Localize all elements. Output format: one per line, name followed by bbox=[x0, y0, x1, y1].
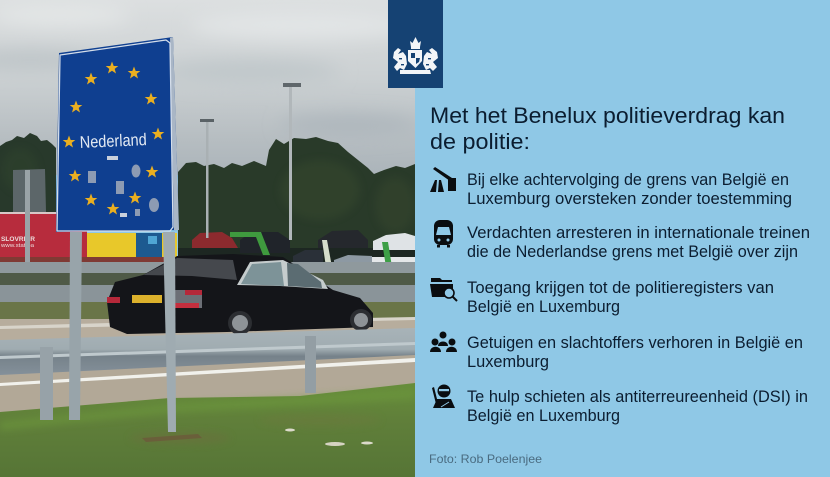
text: Bij elke achtervolging de grens van België en bbox=[467, 171, 789, 189]
small sign and lamps bbox=[13, 169, 46, 212]
photo credit: Foto: Rob Poelenjee bbox=[429, 452, 542, 466]
rail posts bbox=[40, 347, 53, 420]
border sign bbox=[56, 37, 179, 232]
logo: Rijksoverheid bbox=[388, 0, 443, 88]
text bbox=[467, 224, 810, 261]
icon: masked officer bbox=[432, 384, 455, 408]
photo: border sign and motorway: SLOVRIAR bbox=[1, 236, 35, 243]
text bbox=[467, 279, 774, 316]
grass bbox=[0, 383, 415, 477]
text bbox=[467, 171, 792, 208]
text: Luxemburg bbox=[467, 353, 549, 371]
heading: de politie: bbox=[430, 129, 530, 154]
rear guard rails bbox=[0, 262, 415, 303]
photo: border sign and motorway: www.stat.ba bbox=[1, 243, 34, 249]
icon: folder with magnifier bbox=[430, 278, 457, 301]
heading: Met het Benelux politieverdrag kan bbox=[430, 103, 785, 128]
icon: barrier bbox=[430, 167, 456, 192]
icon: train bbox=[434, 220, 453, 248]
text bbox=[467, 388, 808, 425]
text: België en Luxemburg bbox=[467, 298, 620, 316]
text: België en Luxemburg bbox=[467, 407, 620, 425]
car transporter bbox=[178, 248, 415, 262]
text: Luxemburg oversteken zonder toestemming bbox=[467, 190, 792, 208]
item 3: registers bbox=[430, 278, 774, 316]
road below bbox=[0, 355, 415, 412]
text: Getuigen en slachtoffers verhoren in België en bbox=[467, 334, 803, 352]
sign posts bbox=[69, 232, 82, 420]
photo: border sign and motorway bbox=[0, 0, 420, 477]
text: Toegang krijgen tot de politieregisters van bbox=[467, 279, 774, 297]
text: Verdachten arresteren in internationale treinen bbox=[467, 224, 810, 242]
crest bbox=[393, 37, 438, 74]
item 4: witnesses bbox=[430, 332, 803, 371]
heading bbox=[430, 103, 785, 154]
truck bbox=[0, 214, 87, 257]
item 2: train bbox=[434, 220, 810, 261]
panel: blue text background bbox=[415, 0, 830, 477]
tree lines bbox=[0, 133, 56, 212]
sign text: Nederland bbox=[79, 130, 147, 152]
text: die de Nederlandse grens met België over zijn bbox=[467, 243, 798, 261]
icon: group of people bbox=[430, 332, 457, 352]
item 1: border crossing bbox=[430, 167, 792, 208]
front guard rail bbox=[0, 328, 415, 375]
car bbox=[107, 254, 373, 334]
text: Te hulp schieten als antiterreureenheid (DSI) in bbox=[467, 388, 808, 406]
text bbox=[467, 334, 803, 371]
item 5: DSI bbox=[432, 384, 808, 425]
